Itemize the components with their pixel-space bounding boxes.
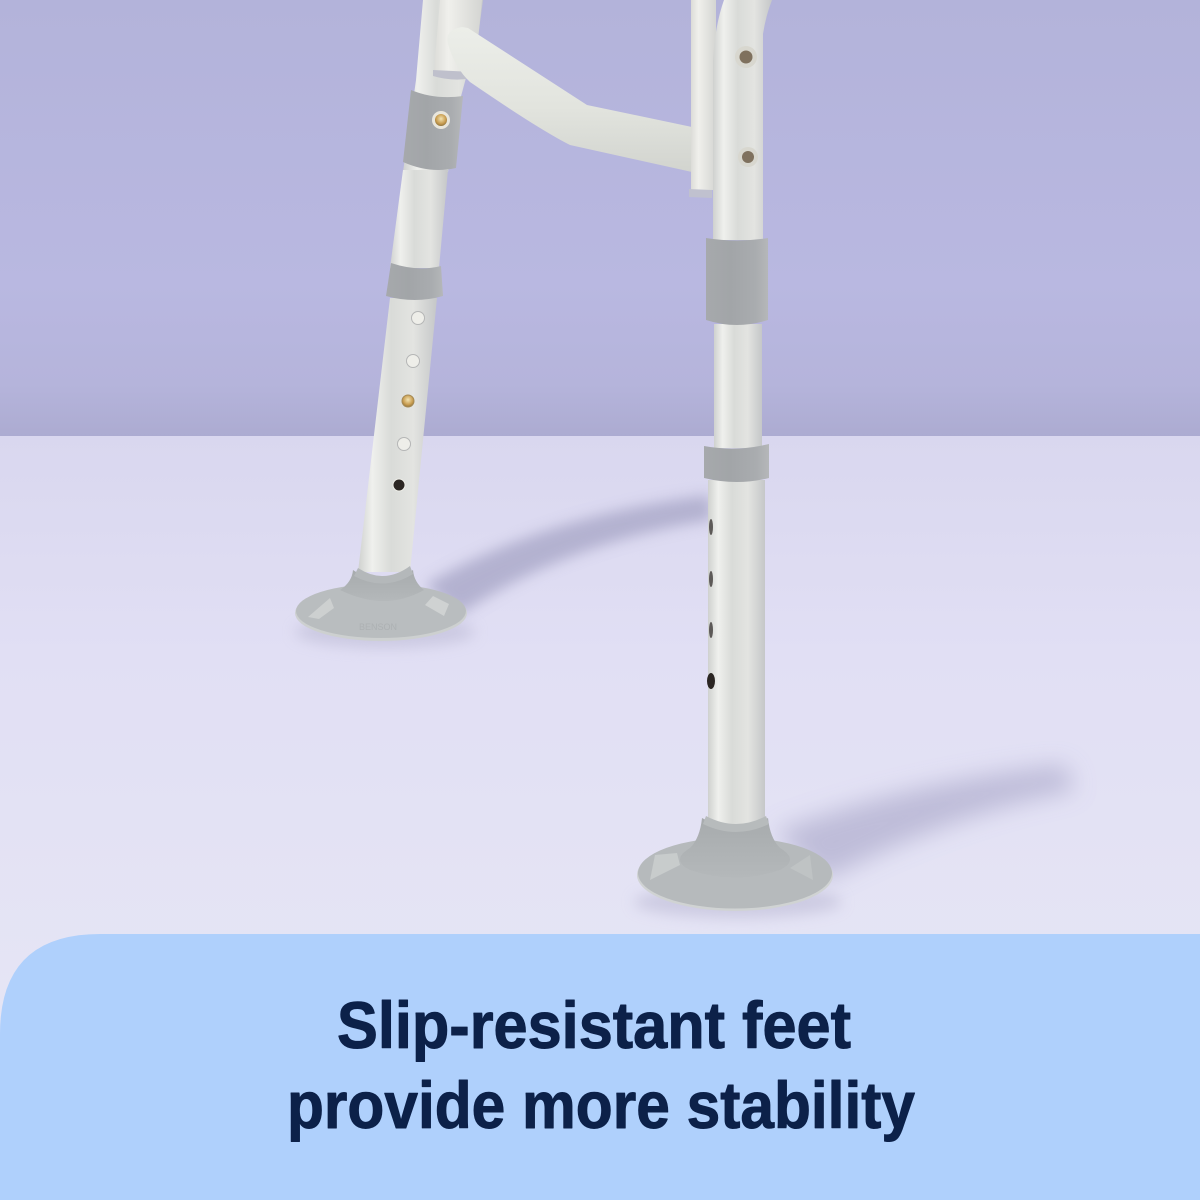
- right middle tube: [714, 324, 762, 448]
- left brass pin: [432, 111, 450, 129]
- left back leg: [295, 0, 483, 641]
- left leg middle tube: [390, 170, 448, 268]
- right lower collar: [704, 444, 769, 482]
- floor surface: [0, 436, 1200, 1056]
- right leg upper tube: [713, 0, 772, 240]
- right upper collar: [706, 238, 768, 325]
- caption heading: [287, 988, 915, 1142]
- left upper collar: [403, 90, 463, 170]
- shadow: left foot contact: [295, 616, 475, 648]
- left lower collar: [386, 263, 443, 300]
- middle screw: [738, 147, 758, 167]
- top screw: [735, 46, 757, 68]
- left inner post: [434, 0, 482, 76]
- right inner post: [691, 0, 716, 190]
- caption panel: [0, 934, 1200, 1200]
- right leg adjustment holes: [707, 519, 715, 689]
- caption heading: Slip-resistant feet: [337, 988, 851, 1062]
- right lower tube: [708, 480, 765, 825]
- left rubber foot: BENSON: [359, 622, 397, 632]
- wall background: [0, 0, 1200, 437]
- left leg adjustment holes: [392, 312, 424, 492]
- left leg end cap: [433, 70, 474, 80]
- left leg upper tube: [403, 0, 483, 172]
- shadow: left foot cast shadow: [425, 495, 712, 615]
- left leg lower tube: [358, 298, 437, 572]
- shadow: right foot cast shadow: [775, 765, 1075, 880]
- right front leg: [637, 0, 833, 911]
- right rubber foot: [637, 816, 833, 911]
- cross brace: [447, 27, 692, 172]
- caption heading: provide more stability: [287, 1068, 915, 1142]
- right post end cap: [689, 189, 712, 198]
- left rubber foot: [295, 566, 467, 641]
- shadow: right foot contact: [634, 886, 842, 918]
